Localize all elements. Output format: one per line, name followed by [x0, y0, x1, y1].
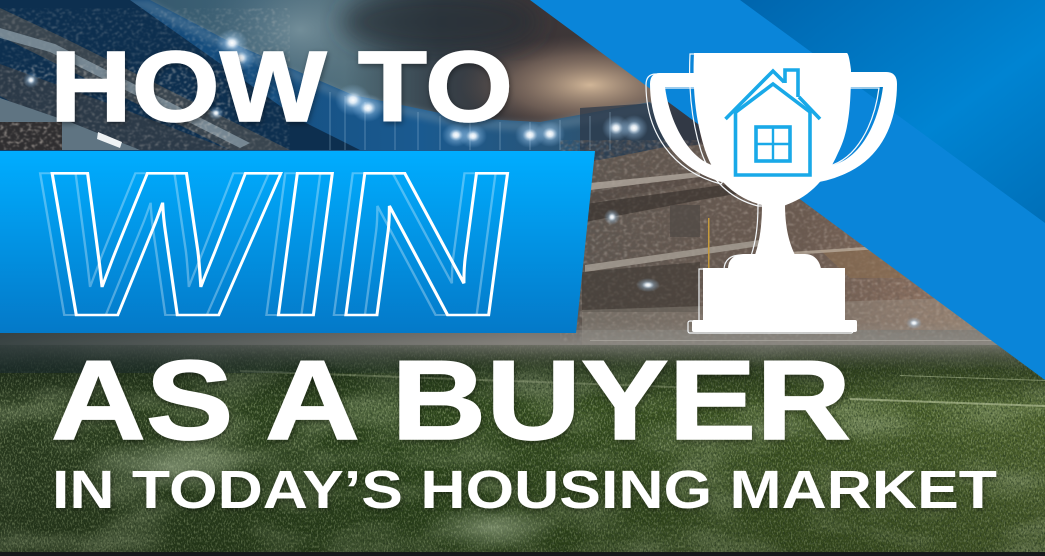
subheading: in today's housing market: IN TODAY’S HOUSING MARKET: [52, 460, 997, 520]
haze shade on the left: [0, 333, 520, 373]
lower stands: [0, 140, 1045, 350]
field haze: [0, 322, 1045, 370]
upper stands on the left: [0, 8, 290, 150]
white sign: [97, 132, 122, 148]
sky and clouds: [0, 0, 1045, 200]
ghost win outline: WIN: [15, 129, 518, 359]
concrete wall: [0, 98, 140, 150]
lower crowd: [0, 122, 62, 150]
darker blue stripe: [740, 0, 1045, 223]
banner: win: [0, 129, 595, 359]
tier one: [0, 8, 290, 150]
trophy body: [650, 53, 897, 332]
grass pitch: [0, 345, 1045, 552]
icon: trophy with house: [646, 53, 897, 333]
stadium floodlights: [23, 29, 922, 329]
heading: how to: HOW TO: [50, 31, 513, 143]
bright blue triangle: [530, 0, 1045, 380]
blue diagonal panel: [530, 0, 1045, 380]
stadium roof and blue glass band: [0, 0, 700, 160]
heading: as a buyer: AS A BUYER: [51, 337, 851, 463]
icon: house: [726, 70, 820, 175]
win outline text: WIN: [27, 129, 530, 359]
bottom dark strip: [0, 552, 1045, 556]
trophy offset outline: [646, 54, 893, 333]
banner shape: [0, 151, 595, 333]
tier two: [0, 64, 230, 150]
